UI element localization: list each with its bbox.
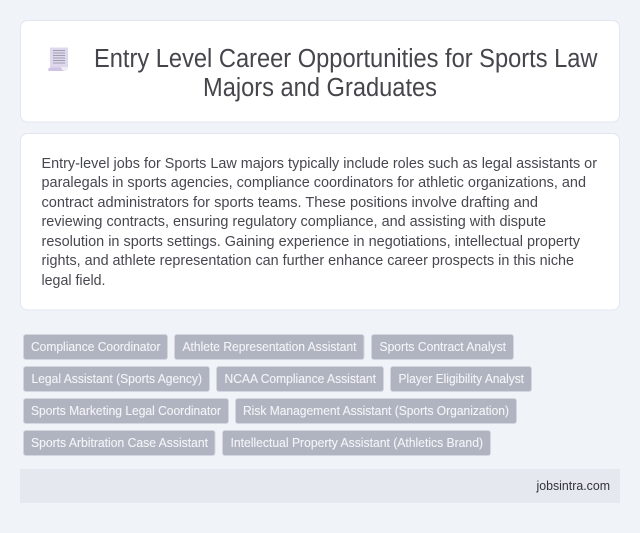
title: Entry Level Career Opportunities for Sports Law: [94, 45, 598, 73]
tag: Intellectual Property Assistant (Athletics Brand): Intellectual Property Assistant (Athletics Brand): [230, 436, 483, 450]
icon: document scroll: [48, 48, 68, 71]
text block: description: reviewing contracts, ensuring regulatory compliance, and assisting with dispute: [42, 214, 546, 230]
tag: Legal Assistant (Sports Agency): [24, 366, 210, 392]
tag: Compliance Coordinator: Compliance Coordinator: [31, 340, 160, 354]
text block: description: paralegals in sports agencies, compliance coordinators for athletic organizations, and: [42, 175, 586, 191]
text block: description: [42, 156, 597, 289]
text block: description: contract administrators for sports teams. These positions involve drafting and: [42, 195, 538, 211]
tag: Player Eligibility Analyst: Player Eligibility Analyst: [398, 372, 524, 386]
text block: description: resolution in sports settings. Gaining experience in negotiations, intellectual property: [42, 234, 581, 250]
footer bar: [20, 469, 620, 503]
tag: Compliance Coordinator: [24, 334, 168, 360]
tag: Sports Arbitration Case Assistant: [24, 430, 215, 456]
text block: description: rights, and athlete representation can further enhance career prospects in this niche: [42, 253, 574, 269]
title: Majors and Graduates: [203, 74, 437, 102]
tag: Legal Assistant (Sports Agency): Legal Assistant (Sports Agency): [32, 372, 202, 386]
tag: Sports Contract Analyst: [372, 334, 514, 360]
footer text: jobsintra.com: [536, 479, 610, 493]
tag list: [24, 334, 532, 456]
text block: description: Entry-level jobs for Sports Law majors typically include roles such as legal assistants or: [42, 156, 597, 172]
tag: Risk Management Assistant (Sports Organization): [236, 398, 516, 424]
tag: Sports Marketing Legal Coordinator: [24, 398, 228, 424]
tag: Sports Contract Analyst: Sports Contract Analyst: [380, 340, 506, 354]
tag: Sports Marketing Legal Coordinator: Sports Marketing Legal Coordinator: [31, 404, 221, 418]
tag: NCAA Compliance Assistant: [216, 366, 384, 392]
text block: description: legal field.: [42, 273, 106, 289]
tag: Athlete Representation Assistant: [174, 334, 364, 360]
panel: title card: [20, 20, 620, 122]
title: [94, 45, 598, 102]
tag: Intellectual Property Assistant (Athletics Brand): [222, 430, 490, 456]
tag: Sports Arbitration Case Assistant: Sports Arbitration Case Assistant: [31, 436, 208, 450]
tag: Risk Management Assistant (Sports Organization): Risk Management Assistant (Sports Organization): [243, 404, 509, 418]
tag: Player Eligibility Analyst: [390, 366, 532, 392]
panel: description: [20, 134, 620, 310]
tag: Athlete Representation Assistant: Athlete Representation Assistant: [182, 340, 357, 354]
tag: NCAA Compliance Assistant: NCAA Compliance Assistant: [224, 372, 376, 386]
